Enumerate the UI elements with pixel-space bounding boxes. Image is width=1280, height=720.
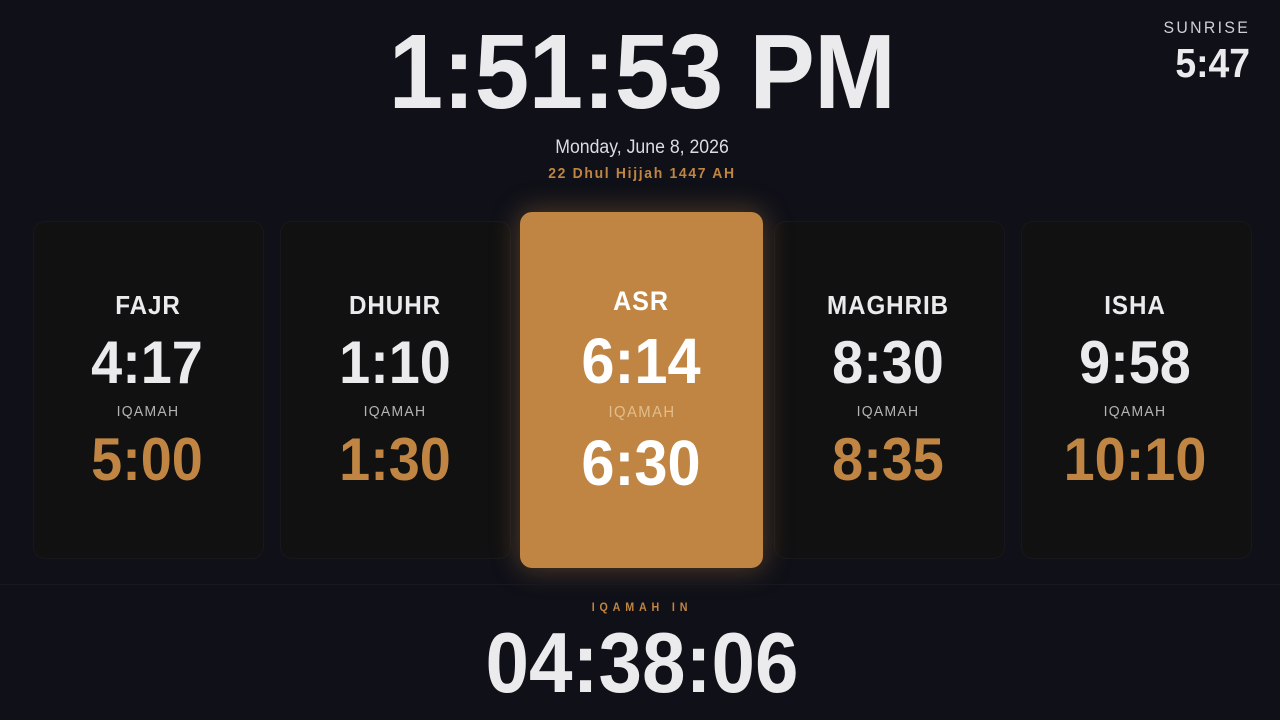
panel: Isha	[1021, 221, 1252, 559]
Maghrib iqamah time: 8:35	[832, 426, 944, 493]
panel: Dhuhr	[280, 221, 511, 559]
Dhuhr adhan time: 1:10	[339, 329, 451, 396]
Asr iqamah label: IQAMAH	[608, 404, 676, 421]
countdown timer: 04:38:06	[485, 616, 799, 711]
Maghrib name: MAGHRIB	[827, 290, 949, 320]
Dhuhr iqamah label: IQAMAH	[364, 403, 426, 420]
Maghrib iqamah label: IQAMAH	[857, 403, 919, 420]
sunrise time: 5:47	[1175, 40, 1250, 86]
Asr name: ASR	[613, 286, 669, 316]
Asr iqamah time: 6:30	[581, 427, 701, 499]
Dhuhr iqamah time: 1:30	[339, 426, 451, 493]
Isha name: ISHA	[1104, 290, 1166, 320]
hijri date: 22 Dhul Hijjah 1447 AH	[548, 165, 736, 182]
header clock: 1:51:53 PM	[389, 13, 895, 131]
panel: Maghrib	[774, 221, 1005, 559]
Fajr adhan time: 4:17	[91, 329, 203, 396]
panel: Fajr	[33, 221, 264, 559]
footer countdown	[0, 584, 1280, 720]
Maghrib adhan time: 8:30	[832, 329, 944, 396]
Fajr name: FAJR	[115, 290, 181, 320]
Fajr iqamah label: IQAMAH	[117, 403, 179, 420]
Asr adhan time: 6:14	[581, 325, 701, 397]
Dhuhr name: DHUHR	[349, 290, 441, 320]
Isha iqamah time: 10:10	[1064, 426, 1206, 493]
Isha adhan time: 9:58	[1079, 329, 1191, 396]
Fajr iqamah time: 5:00	[91, 426, 203, 493]
Isha iqamah label: IQAMAH	[1104, 403, 1166, 420]
sunrise block	[1163, 18, 1250, 86]
panel: Asr (active)	[520, 212, 763, 568]
sunrise label: SUNRISE	[1163, 18, 1250, 37]
countdown label: IQAMAH IN	[592, 602, 692, 614]
gregorian date: Monday, June 8, 2026	[555, 137, 729, 158]
